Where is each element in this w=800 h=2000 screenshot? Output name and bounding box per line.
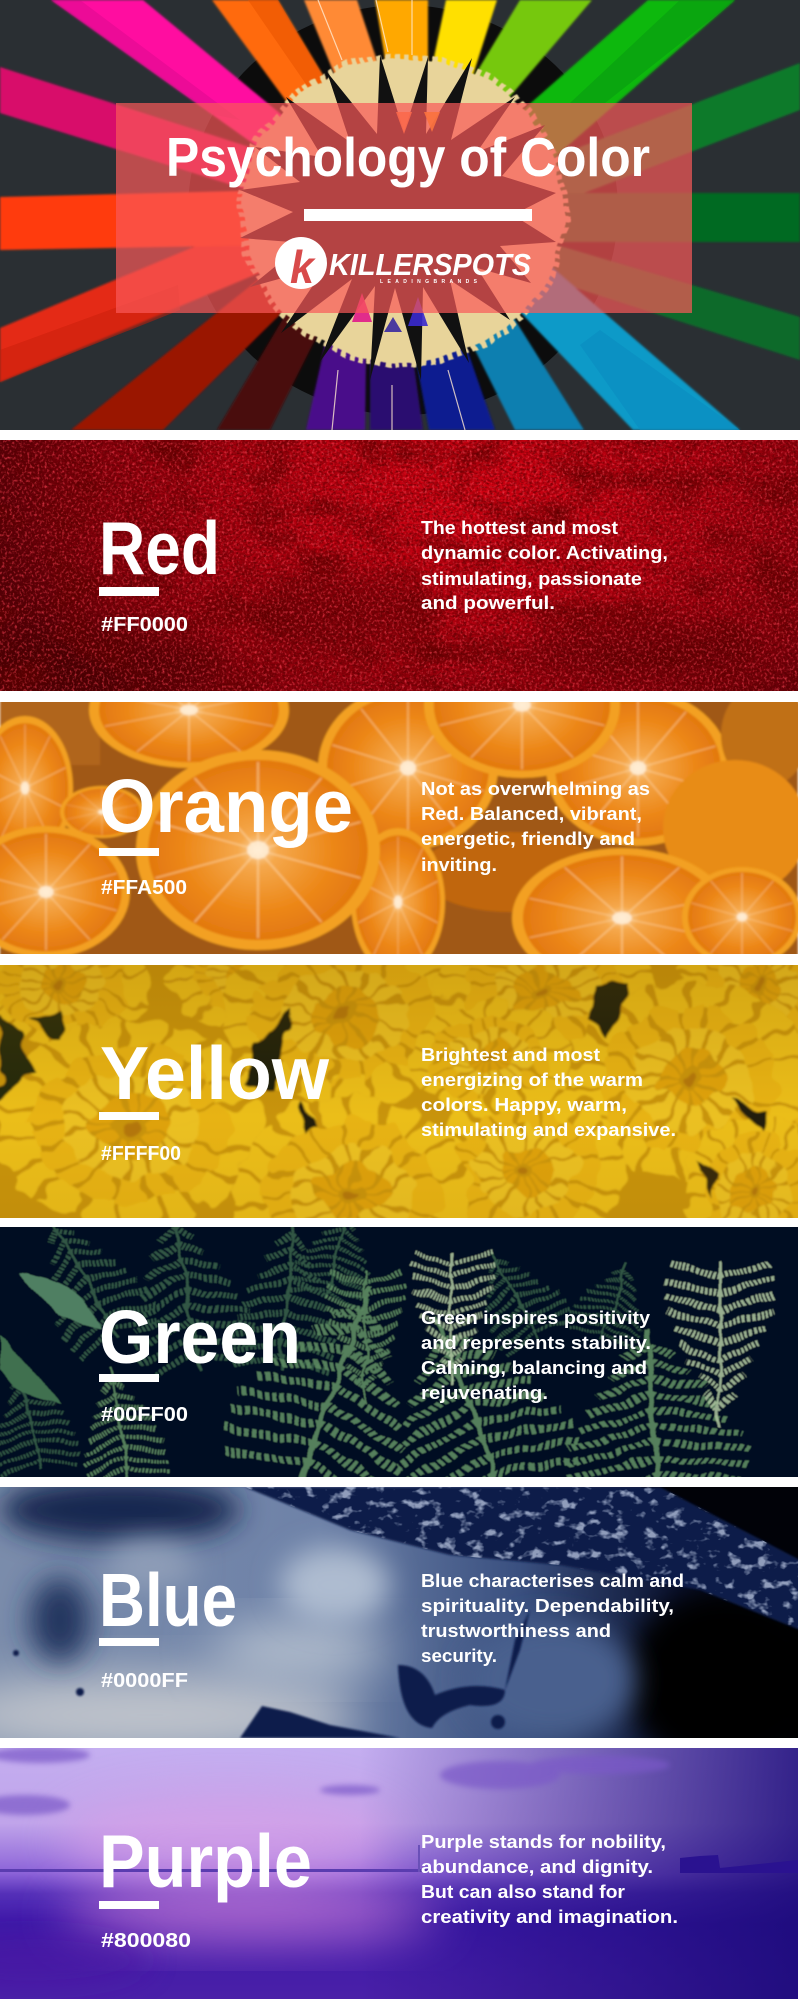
yellow flowers photo (0, 965, 798, 1218)
description: Brightest and most (421, 1044, 600, 1065)
heading bar (99, 848, 159, 856)
description: stimulating, passionate (421, 568, 642, 589)
hero background (0, 0, 800, 430)
heading bar (99, 1901, 159, 1909)
panel: purple (0, 1747, 798, 1999)
heading bar (99, 587, 159, 596)
fern leaves (0, 1272, 102, 1405)
hex code: #800080 (101, 1930, 191, 1952)
description: abundance, and dignity. (421, 1856, 653, 1877)
translucent title box (116, 103, 692, 313)
panel: yellow (0, 965, 798, 1218)
heading bar (99, 1374, 159, 1382)
description: colors. Happy, warm, (421, 1094, 627, 1115)
logo tagline: LEADINGBRANDS (380, 279, 478, 285)
heading: Green (99, 1295, 301, 1379)
hero panel (0, 0, 800, 430)
title: Psychology of Color (166, 126, 650, 188)
bridge and skyline (0, 1845, 798, 1873)
fern photo (0, 1227, 798, 1477)
description (421, 517, 668, 613)
heading: Blue (99, 1558, 237, 1642)
panel: blue (0, 1478, 800, 1770)
logo emblem: k (290, 241, 316, 293)
coloured pencils (0, 0, 800, 430)
hex code: #FFA500 (101, 877, 187, 899)
description: creativity and imagination. (421, 1906, 678, 1927)
orange slices photo (0, 702, 798, 954)
logo: Killerspots (275, 237, 531, 293)
description: dynamic color. Activating, (421, 542, 668, 563)
hex code: #00FF00 (101, 1404, 188, 1426)
heading bar (99, 1112, 159, 1120)
panel: green (0, 1227, 798, 1477)
water splash drops (13, 1610, 530, 1738)
heading: Red (99, 506, 220, 590)
description: Not as overwhelming as (421, 778, 650, 799)
title divider (304, 209, 532, 221)
description: rejuvenating. (421, 1382, 548, 1403)
hex code: #FF0000 (101, 614, 188, 636)
description (421, 1570, 684, 1666)
description: spirituality. Dependability, (421, 1595, 674, 1616)
description (421, 1044, 676, 1140)
heading bar (99, 1638, 159, 1646)
warm photo shading (0, 965, 798, 1218)
logo wordmark: KILLERSPOTS (329, 247, 531, 282)
dark shadow around pencils (188, 5, 618, 415)
description: trustworthiness and (421, 1620, 611, 1641)
description (421, 1831, 678, 1927)
purple seascape photo (0, 1747, 798, 1999)
description: But can also stand for (421, 1881, 625, 1902)
heading: Yellow (100, 1031, 330, 1115)
description: energetic, friendly and (421, 828, 635, 849)
logo emblem (275, 237, 327, 293)
description: Purple stands for nobility, (421, 1831, 666, 1852)
description: security. (421, 1645, 497, 1666)
heading: Orange (99, 764, 353, 848)
description: Blue characterises calm and (421, 1570, 684, 1591)
hex code: #0000FF (101, 1670, 188, 1692)
water splash photo (0, 1478, 800, 1770)
description (421, 778, 650, 875)
description: The hottest and most (421, 517, 618, 538)
coloured tips (352, 112, 440, 332)
description: and powerful. (421, 592, 555, 613)
heading: Purple (99, 1819, 312, 1903)
description: stimulating and expansive. (421, 1119, 676, 1140)
description: Red. Balanced, vibrant, (421, 803, 642, 824)
panel: red (0, 440, 798, 700)
panel: orange (0, 702, 798, 954)
description: Calming, balancing and (421, 1357, 647, 1378)
description (421, 1307, 651, 1403)
description: Green inspires positivity (421, 1307, 651, 1328)
pencil highlights (0, 0, 740, 430)
description: and represents stability. (421, 1332, 651, 1353)
description: inviting. (421, 854, 497, 875)
red fabric background (0, 440, 798, 700)
water crest (245, 1487, 800, 1632)
pencil wood circle (241, 56, 565, 364)
description: energizing of the warm (421, 1069, 643, 1090)
hex code: #FFFF00 (101, 1143, 181, 1165)
pencil tip gaps (240, 55, 556, 380)
